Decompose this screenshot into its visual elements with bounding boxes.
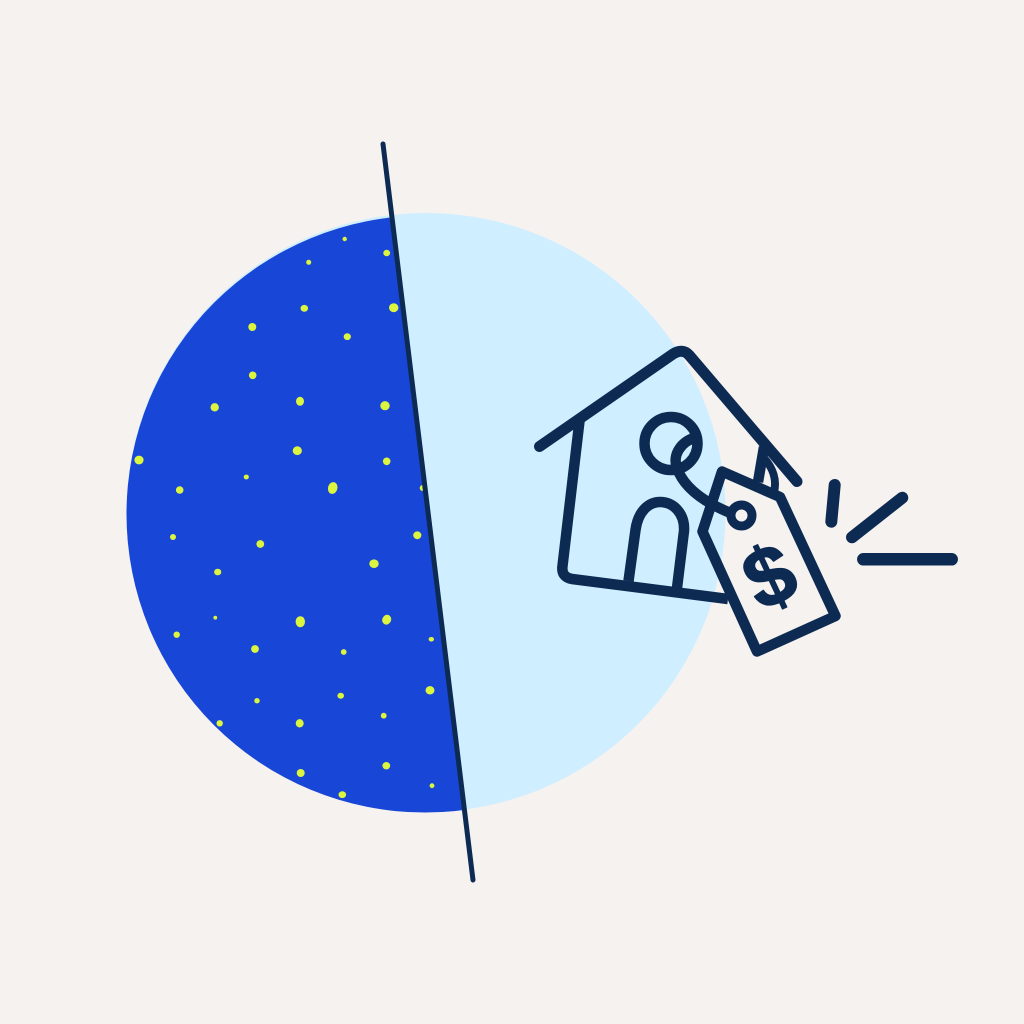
burst line: top (831, 485, 835, 522)
burst lines (831, 485, 952, 559)
house left wall and floor (562, 421, 728, 599)
illustration: home price split circle (126, 142, 958, 882)
dollar sign: $ (729, 524, 811, 629)
small string loop (764, 458, 775, 492)
round window (644, 417, 698, 470)
icon: house with price tag (540, 351, 836, 652)
door (628, 502, 684, 588)
price tag outline (702, 472, 836, 652)
light blue circle (126, 213, 726, 812)
burst line: diagonal (852, 498, 902, 537)
house roof (540, 351, 797, 482)
dividing line (383, 144, 473, 880)
house right wall (758, 447, 764, 482)
tag string (676, 437, 733, 514)
dark blue half circle (126, 218, 462, 812)
yellow dots (134, 237, 434, 798)
tag hole (731, 505, 752, 526)
burst line: horizontal (863, 553, 952, 566)
